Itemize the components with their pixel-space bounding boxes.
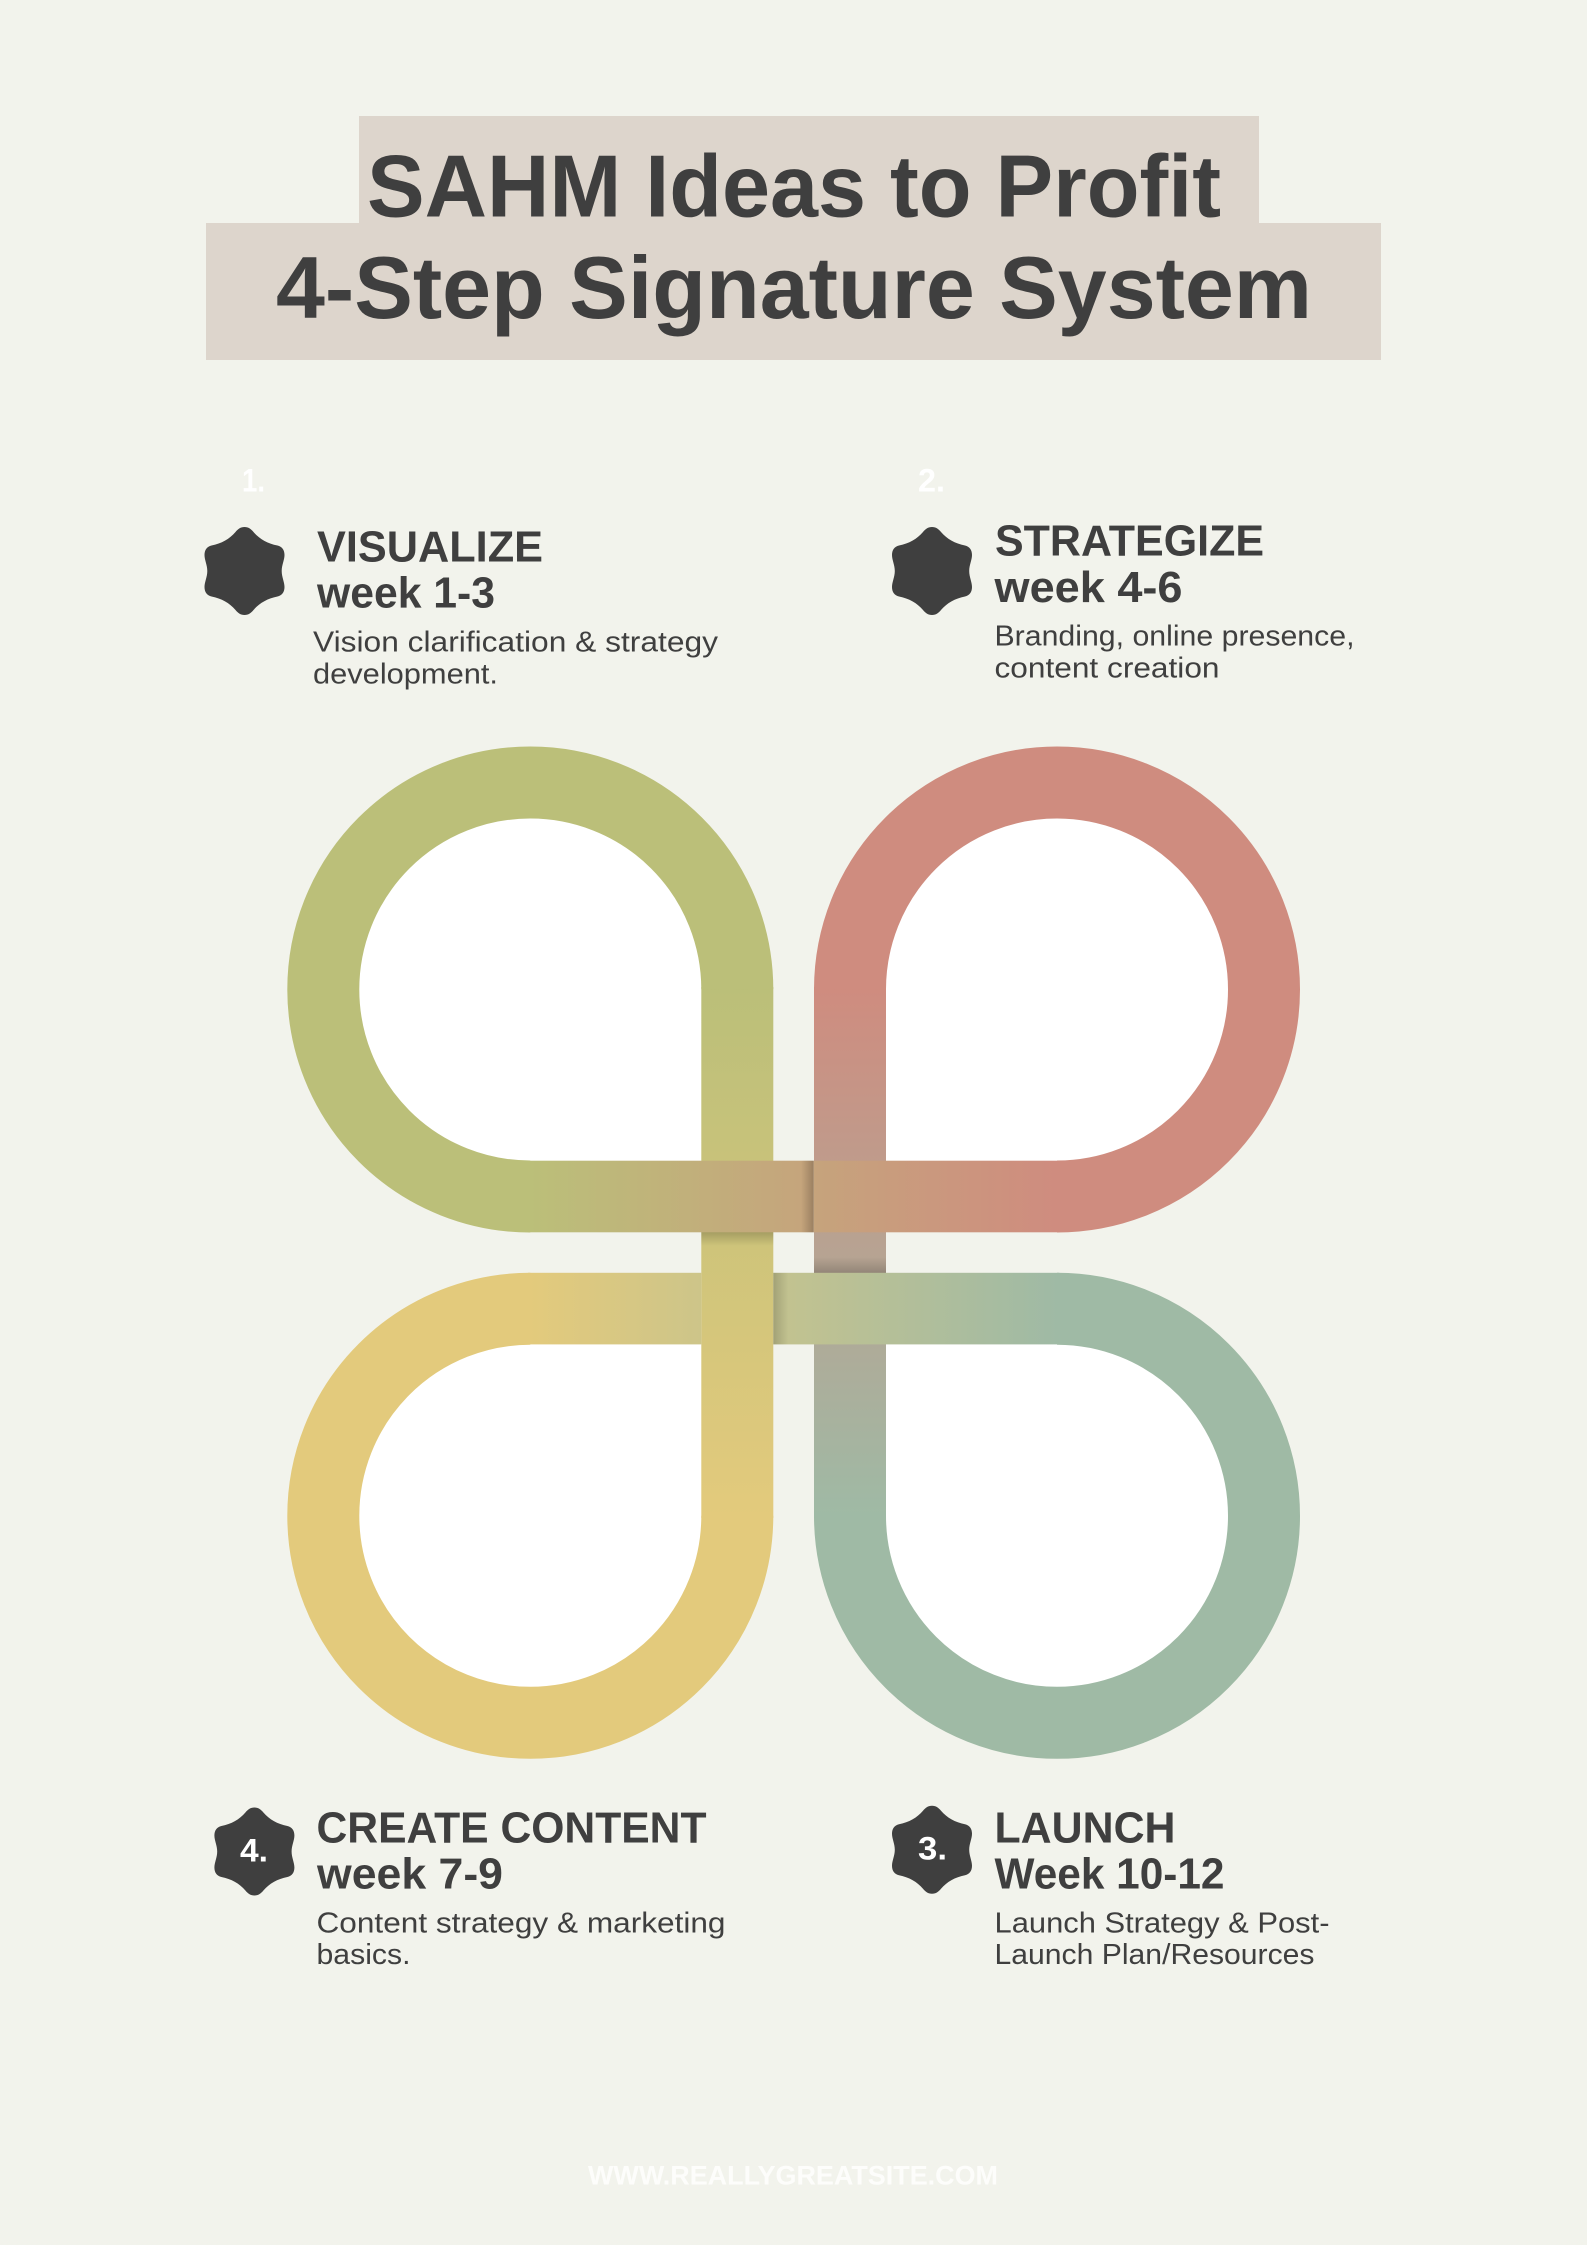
shadow on left vertical	[701, 1232, 773, 1246]
step 3: launch	[892, 1805, 1330, 1971]
heading: create content: CREATE CONTENT	[316, 1805, 707, 1853]
band: left vertical	[701, 987, 773, 1518]
number 2: 2.	[918, 463, 945, 499]
subheading: week 7-9: week 7-9	[316, 1850, 503, 1898]
description: Branding, online presence,	[994, 620, 1354, 652]
number 1: 1.	[242, 463, 265, 499]
footer url: WWW.REALLYGREATSITE.COM	[588, 2160, 998, 2190]
band: lower horizontal left	[528, 1273, 701, 1344]
teardrop: top left	[359, 818, 702, 1161]
subheading: week 10-12: Week 10-12	[994, 1850, 1224, 1898]
icon: badge 4	[214, 1808, 294, 1896]
shadow under upper band on right vertical	[814, 1257, 886, 1273]
icon: badge 2	[892, 527, 972, 615]
loop: yellow	[323, 1309, 737, 1723]
number 4: 4.	[240, 1833, 268, 1869]
clover knot diagram	[323, 782, 1264, 1723]
title banner	[206, 116, 1381, 360]
description: development.	[313, 658, 498, 690]
title line 1: SAHM Ideas to Profit	[367, 137, 1221, 236]
step 2: strategize	[892, 463, 1354, 684]
number 3: 3.	[918, 1830, 947, 1866]
teardrop: bottom right	[885, 1344, 1229, 1688]
description: Launch Plan/Resources	[994, 1939, 1314, 1971]
teardrop: top right	[885, 817, 1229, 1161]
heading: strategize: STRATEGIZE	[995, 518, 1264, 566]
band: right vertical	[814, 987, 886, 1518]
icon: badge 3	[892, 1806, 972, 1894]
band: upper horizontal left	[528, 1161, 814, 1232]
step 4: create content	[214, 1805, 726, 1971]
subheading: week 1-3: week 1-3	[316, 570, 495, 618]
band: upper horizontal right	[814, 1161, 1059, 1232]
shadow on upper horizontal	[801, 1161, 814, 1232]
subheading: week 4-6: week 4-6	[993, 564, 1182, 612]
band: lower horizontal right	[773, 1273, 1059, 1344]
shadow on lower horizontal	[773, 1273, 788, 1344]
icon: badge 1	[204, 527, 284, 615]
description: basics.	[316, 1939, 410, 1971]
description: Content strategy & marketing	[316, 1907, 726, 1939]
description: Vision clarification & strategy	[313, 626, 719, 658]
description: content creation	[994, 652, 1220, 684]
heading: visualize: VISUALIZE	[317, 524, 543, 572]
description: Launch Strategy & Post-	[994, 1907, 1330, 1939]
title line 2: 4-Step Signature System	[276, 238, 1312, 337]
step 1: visualize	[204, 463, 719, 690]
loop: teal	[850, 1309, 1264, 1723]
loop: red	[850, 782, 1264, 1196]
heading: launch: LAUNCH	[994, 1805, 1176, 1853]
teardrop: bottom left	[359, 1344, 702, 1687]
loop: green	[323, 782, 737, 1196]
